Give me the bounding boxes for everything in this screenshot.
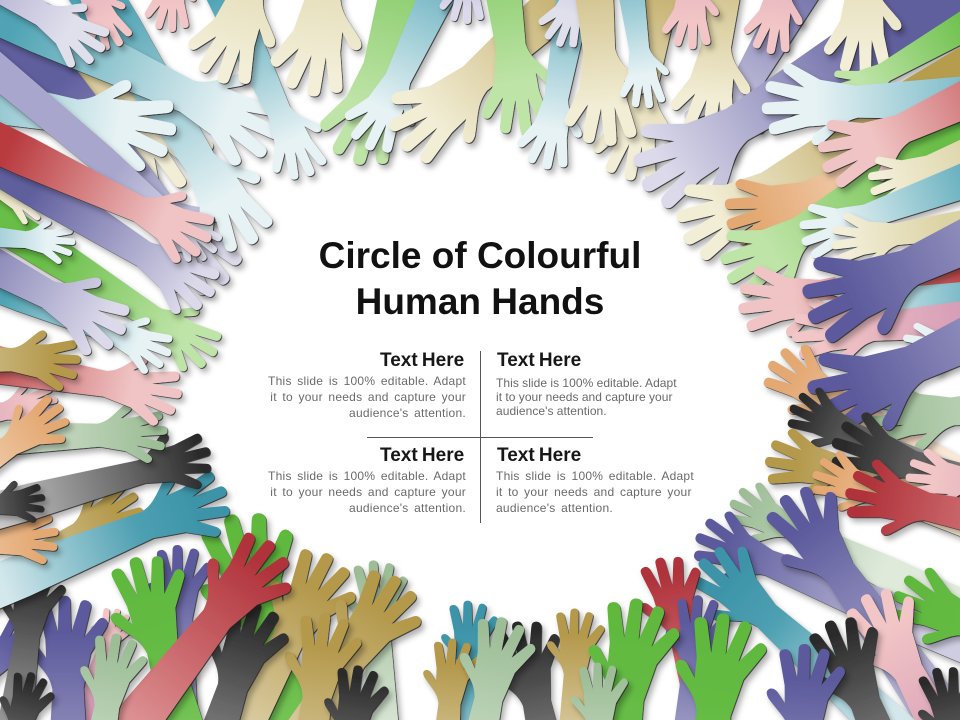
icon: cream hand 2 — [266, 0, 473, 102]
icon: teal hand low — [677, 531, 960, 720]
icon: red hand top left — [0, 0, 224, 272]
icon: khaki hand bottom — [529, 608, 605, 720]
icon: dark hand bottom — [483, 614, 701, 720]
icon: teal hand — [0, 0, 297, 178]
text block: top left: This slide is 100% editable. Adapt — [268, 374, 466, 388]
icon: pale blue hand left — [0, 134, 180, 381]
icon: khaki hand lower left 2 — [0, 556, 435, 720]
icon: khaki hand 5 — [661, 0, 960, 277]
text block: bottom left — [268, 469, 466, 515]
icon: green hand bottom 2 — [564, 608, 771, 720]
icon: khaki hand lower left 3 — [190, 608, 365, 720]
icon: sage hand low — [719, 475, 960, 720]
icon: sage hand lower left — [344, 559, 427, 720]
icon: dark hand corner — [908, 660, 960, 720]
icon: red arm hand — [0, 518, 307, 720]
icon: lavender hand — [0, 0, 120, 78]
icon: purple hand left bottom — [27, 596, 108, 720]
title: Circle of Colourful — [319, 235, 641, 276]
icon: pale pink hand — [145, 0, 196, 32]
text block: top left — [268, 374, 466, 420]
text block: bottom right: it to your needs and capture your — [496, 485, 692, 499]
text block: top left: audience's attention. — [349, 406, 466, 420]
icon: slate arm low — [684, 503, 960, 720]
text block: top left: it to your needs and capture your — [270, 390, 466, 404]
icon: cream hand right — [859, 0, 960, 217]
icon: khaki hand 3 — [497, 0, 649, 150]
icon: green hand 2 — [380, 0, 562, 141]
text block: top right — [496, 376, 677, 418]
icon: slate arm — [672, 0, 960, 175]
icon: sage hand left bottom — [0, 628, 151, 720]
icon: slate hand large — [787, 0, 960, 361]
icon: khaki hand — [0, 0, 229, 207]
icon: gray hand — [0, 423, 218, 639]
text block: bottom left: This slide is 100% editable. Adapt — [268, 469, 466, 483]
text block: top right: audience's attention. — [496, 404, 607, 418]
icon: teal hand left — [0, 458, 241, 720]
icon: khaki lower hand — [588, 0, 796, 187]
icon: pink hand left — [0, 378, 62, 503]
icon: dark hand lower left — [0, 591, 296, 720]
icon: green hand edge — [881, 559, 960, 720]
title — [319, 235, 641, 322]
divider: vertical — [480, 351, 481, 523]
icon: dark hand right — [822, 405, 960, 692]
text block: bottom left: audience's attention. — [349, 501, 466, 515]
heading: top left: Text Here — [380, 350, 464, 371]
icon: green hand bottom — [477, 593, 684, 720]
icon: slate hand bottom — [617, 593, 731, 720]
icon: red hand left — [0, 250, 187, 430]
icon: green hand 3 — [821, 0, 960, 125]
icon: pale pink hand bottom left — [0, 602, 139, 720]
text block: top right: This slide is 100% editable. Adapt — [496, 376, 677, 390]
text block: bottom right: This slide is 100% editable. Adapt — [496, 469, 694, 483]
icon: teal hand pale — [514, 0, 680, 174]
icon: cream hand top right — [824, 0, 901, 76]
icon: teal white arm — [820, 255, 960, 331]
icon: green hand left bottom — [97, 546, 386, 720]
heading: bottom left: Text Here — [380, 445, 464, 466]
icon: cream hand left — [0, 12, 55, 230]
icon: khaki hand 2 — [371, 0, 960, 180]
icon: red hand bottom — [629, 549, 863, 720]
icon: khaki hand 4 — [667, 0, 836, 140]
icon: slate hand left — [0, 0, 141, 367]
icon: green hand — [313, 0, 619, 175]
icon: green hand lower left — [183, 501, 544, 720]
icon: dark hand lower — [246, 661, 391, 720]
icon: sage hand bottom — [323, 610, 540, 720]
icon: black hand — [779, 380, 960, 665]
text block: top right: it to your needs and capture your — [496, 390, 672, 404]
icon: lilac hand left — [0, 0, 231, 326]
icon: slate hand left bottom — [147, 545, 211, 720]
icon: slate hand bottom mid — [742, 643, 846, 720]
icon: khaki hand right — [761, 426, 960, 583]
icon: peach hand right — [752, 333, 960, 720]
icon: teal hand bottom — [441, 601, 498, 720]
icon: teal hand 3 — [26, 0, 338, 190]
icon: slate hand low — [751, 471, 960, 720]
icon: purple hand edge — [0, 607, 49, 720]
icon: khaki hand left — [0, 471, 154, 720]
icon: pink hand bottom right — [832, 576, 960, 720]
icon: peach hand 2 — [805, 445, 960, 670]
icon: teal arm hand — [0, 0, 288, 267]
icon: dark hand bottom right — [795, 606, 960, 720]
icon: light teal hand — [552, 0, 674, 112]
icon: pink hand edge — [903, 447, 960, 552]
icon: khaki hand mid left — [0, 311, 82, 392]
icon: green hand left — [0, 9, 232, 382]
icon: lilac hand small — [0, 0, 231, 272]
text block: bottom right: audience's attention. — [496, 501, 613, 515]
icon: khaki hand bottom 2 — [378, 636, 483, 720]
icon: lilac hand — [615, 0, 960, 227]
title: Human Hands — [356, 281, 604, 322]
icon: teal arm right — [791, 5, 960, 270]
icon: pink hand — [0, 0, 142, 59]
icon: peach hand left low — [0, 505, 63, 639]
icon: red hand right — [805, 0, 960, 202]
icon: sage hand right — [867, 322, 960, 455]
text block: bottom right — [496, 469, 694, 515]
icon: sage small hand — [571, 663, 628, 720]
icon: dark hand left — [0, 477, 48, 579]
icon: red hand low right — [838, 455, 960, 672]
icon: pale teal hand — [335, 0, 673, 163]
icon: purple small hand — [440, 0, 491, 24]
icon: gray lilac hand — [533, 0, 754, 55]
icon: teal hand left top — [0, 185, 77, 265]
icon: dark hand left bottom — [0, 559, 68, 720]
divider: horizontal — [367, 437, 593, 438]
icon: cream hand — [180, 0, 507, 95]
icon: purple arm hand — [0, 0, 258, 313]
icon: khaki hand lower left — [0, 536, 368, 720]
icon: light blue hand — [0, 0, 183, 176]
icon: teal hand edge — [899, 280, 960, 376]
icon: pink hand 2 — [662, 0, 719, 49]
text block: bottom left: it to your needs and capture your — [270, 485, 466, 499]
icon: pink hand 3 — [740, 0, 892, 59]
icon: sage hand left — [0, 402, 169, 483]
heading: bottom right: Text Here — [497, 445, 581, 466]
icon: teal hand right — [760, 36, 960, 147]
icon: slate hand 2 — [792, 0, 960, 457]
icon: dark hand corner left — [0, 666, 59, 720]
icon: pink arm hand — [789, 240, 960, 370]
icon: green hand 4 — [706, 0, 960, 311]
icon: green small hand — [0, 0, 39, 128]
heading: top right: Text Here — [497, 350, 581, 371]
icon: peach hand left — [0, 384, 80, 720]
icon: khaki arm right — [827, 138, 960, 272]
icon: peach arm hand — [715, 0, 960, 258]
icon: red hand mid right — [733, 169, 960, 343]
